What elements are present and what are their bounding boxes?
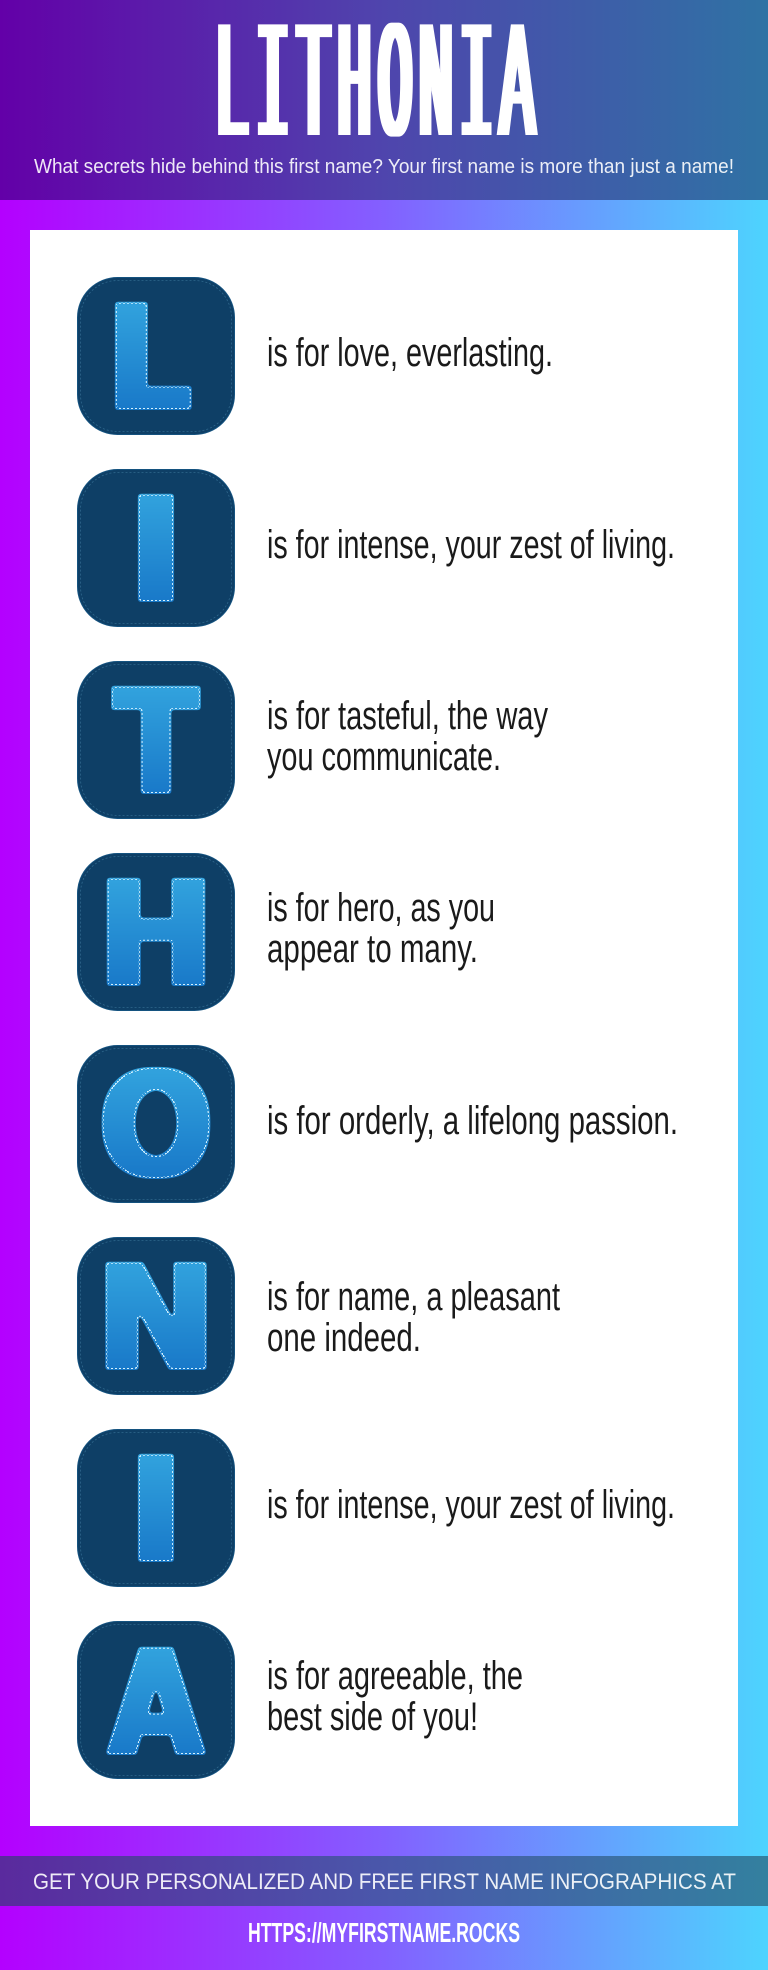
row: H — [78, 852, 495, 1019]
text: A lines: best side of you! — [267, 1695, 478, 1739]
row: N — [78, 1235, 560, 1402]
row: L — [78, 275, 553, 442]
text: N lines: is for name, a pleasant — [267, 1275, 560, 1319]
text: T lines: you communicate. — [267, 735, 501, 779]
icon: letter T: T — [115, 661, 197, 826]
text: T lines: is for tasteful, the way — [267, 694, 548, 738]
icon: letter L — [78, 275, 234, 442]
icon: letter A: A — [110, 1621, 202, 1788]
icon: letter I: I — [128, 467, 184, 634]
row: T — [78, 661, 548, 826]
icon: letter I — [78, 467, 234, 634]
text: N lines — [267, 1275, 560, 1360]
text: H lines: appear to many. — [267, 927, 478, 971]
text: H lines: is for hero, as you — [267, 886, 495, 930]
icon: letter H: H — [98, 852, 214, 1019]
icon: letter I second: I — [128, 1427, 184, 1594]
footer call to action: GET YOUR PERSONALIZED AND FREE FIRST NAME INFOGRAPHICS AT — [33, 1869, 736, 1894]
row: I second — [78, 1427, 675, 1594]
header band — [0, 0, 768, 200]
row: O — [78, 1042, 678, 1209]
icon: letter A — [78, 1621, 234, 1788]
title: LITHONIA — [215, 0, 541, 186]
text: A lines: is for agreeable, the — [267, 1654, 523, 1698]
panel: white card — [30, 230, 738, 1826]
icon: letter N: N — [96, 1235, 216, 1402]
icon: letter I second — [78, 1427, 234, 1594]
icon: letter T — [78, 661, 234, 826]
row: A — [78, 1621, 523, 1788]
text: H lines — [267, 886, 495, 971]
text: T lines — [267, 694, 548, 779]
subtitle: What secrets hide behind this first name? Your first name is more than just a name! — [34, 155, 734, 178]
footer band — [0, 1856, 768, 1906]
row: I — [78, 467, 675, 634]
text: A lines — [267, 1654, 523, 1739]
icon: letter O: O — [99, 1042, 213, 1209]
text: N lines: one indeed. — [267, 1316, 421, 1360]
text: L line: is for love, everlasting. — [267, 331, 553, 375]
footer URL: HTTPS://MYFIRSTNAME.ROCKS — [248, 1917, 520, 1948]
icon: letter L: L — [107, 275, 191, 442]
